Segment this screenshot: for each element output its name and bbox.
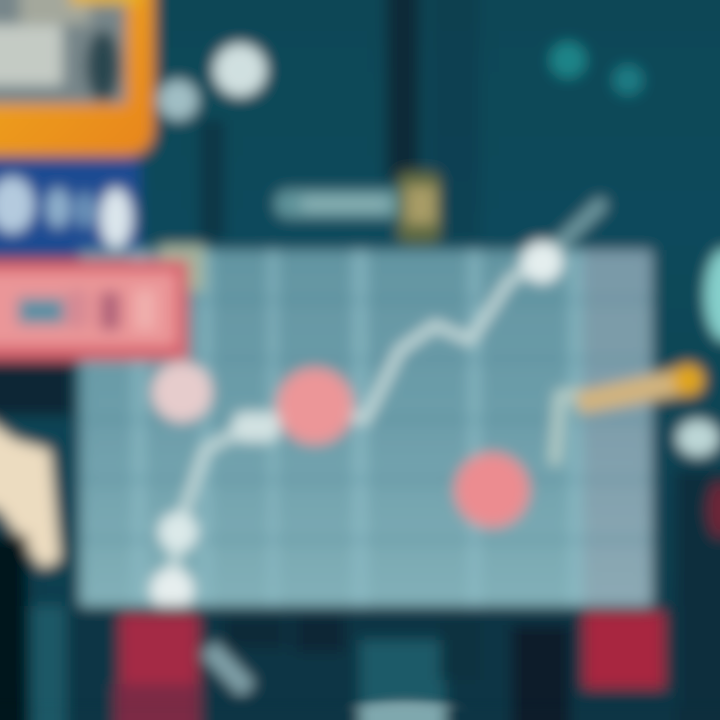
line chart: [172, 205, 600, 590]
red banner: [0, 260, 188, 360]
white lamps: [158, 44, 266, 120]
faint title bar: [275, 172, 440, 244]
teal background lights: [550, 42, 643, 95]
blue sign: [0, 158, 140, 256]
bottom edge strip: [0, 700, 568, 720]
golden arrow tail: [575, 364, 704, 414]
right edge lights: [675, 249, 720, 720]
dark left block: [0, 362, 72, 416]
cream figure: [0, 400, 60, 568]
yellow knob at panel corner: [160, 245, 204, 291]
panel right shade: [583, 250, 652, 606]
dark vertical poles: [200, 0, 480, 240]
chart markers: [150, 241, 563, 612]
panel grid columns: [132, 250, 583, 606]
dark lower left: [0, 535, 28, 720]
chart panel: [80, 250, 652, 606]
yellow sign: [0, 0, 154, 156]
bottom crowd: [32, 606, 680, 720]
